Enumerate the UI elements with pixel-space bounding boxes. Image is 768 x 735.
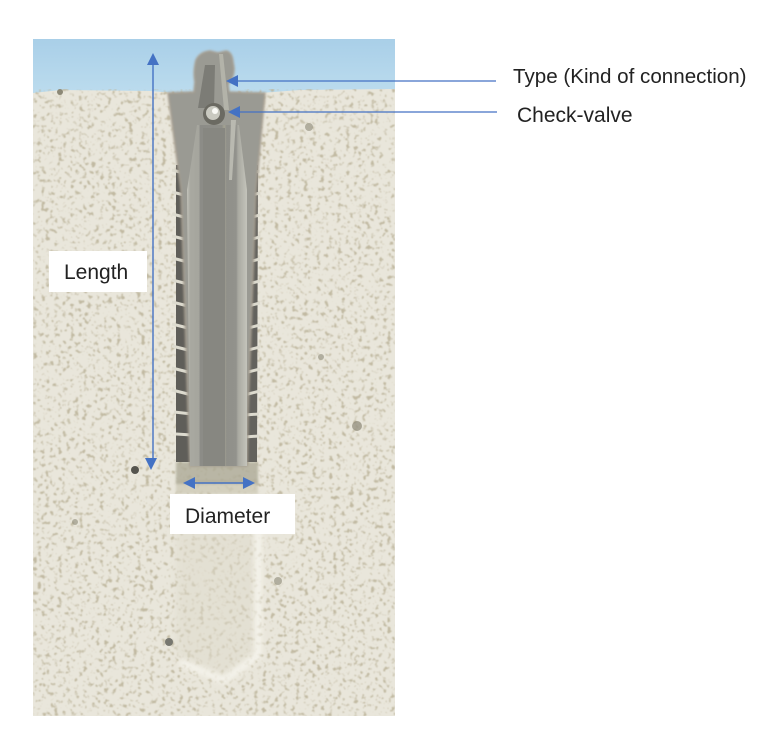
check-valve ball — [203, 103, 225, 125]
arrow: type pointer — [226, 75, 496, 87]
sky background — [33, 39, 395, 95]
aerated concrete block — [33, 89, 395, 716]
anchor body — [168, 51, 265, 466]
arrow: diameter — [183, 477, 255, 489]
anchor cavity — [176, 480, 258, 494]
arrow: length — [145, 53, 159, 470]
anchor teeth — [172, 165, 260, 462]
label: length — [49, 251, 147, 292]
photo: anchor in aerated concrete — [33, 39, 395, 716]
label: length: Length — [64, 261, 128, 284]
dark pores on concrete — [57, 89, 362, 585]
label: diameter — [170, 494, 295, 534]
drilled hole below the anchor — [165, 520, 258, 682]
arrow: check-valve pointer — [228, 106, 497, 118]
label: type: Type (Kind of connection) — [513, 65, 747, 88]
label: diameter: Diameter — [185, 505, 270, 528]
label: check-valve: Check-valve — [517, 104, 633, 127]
